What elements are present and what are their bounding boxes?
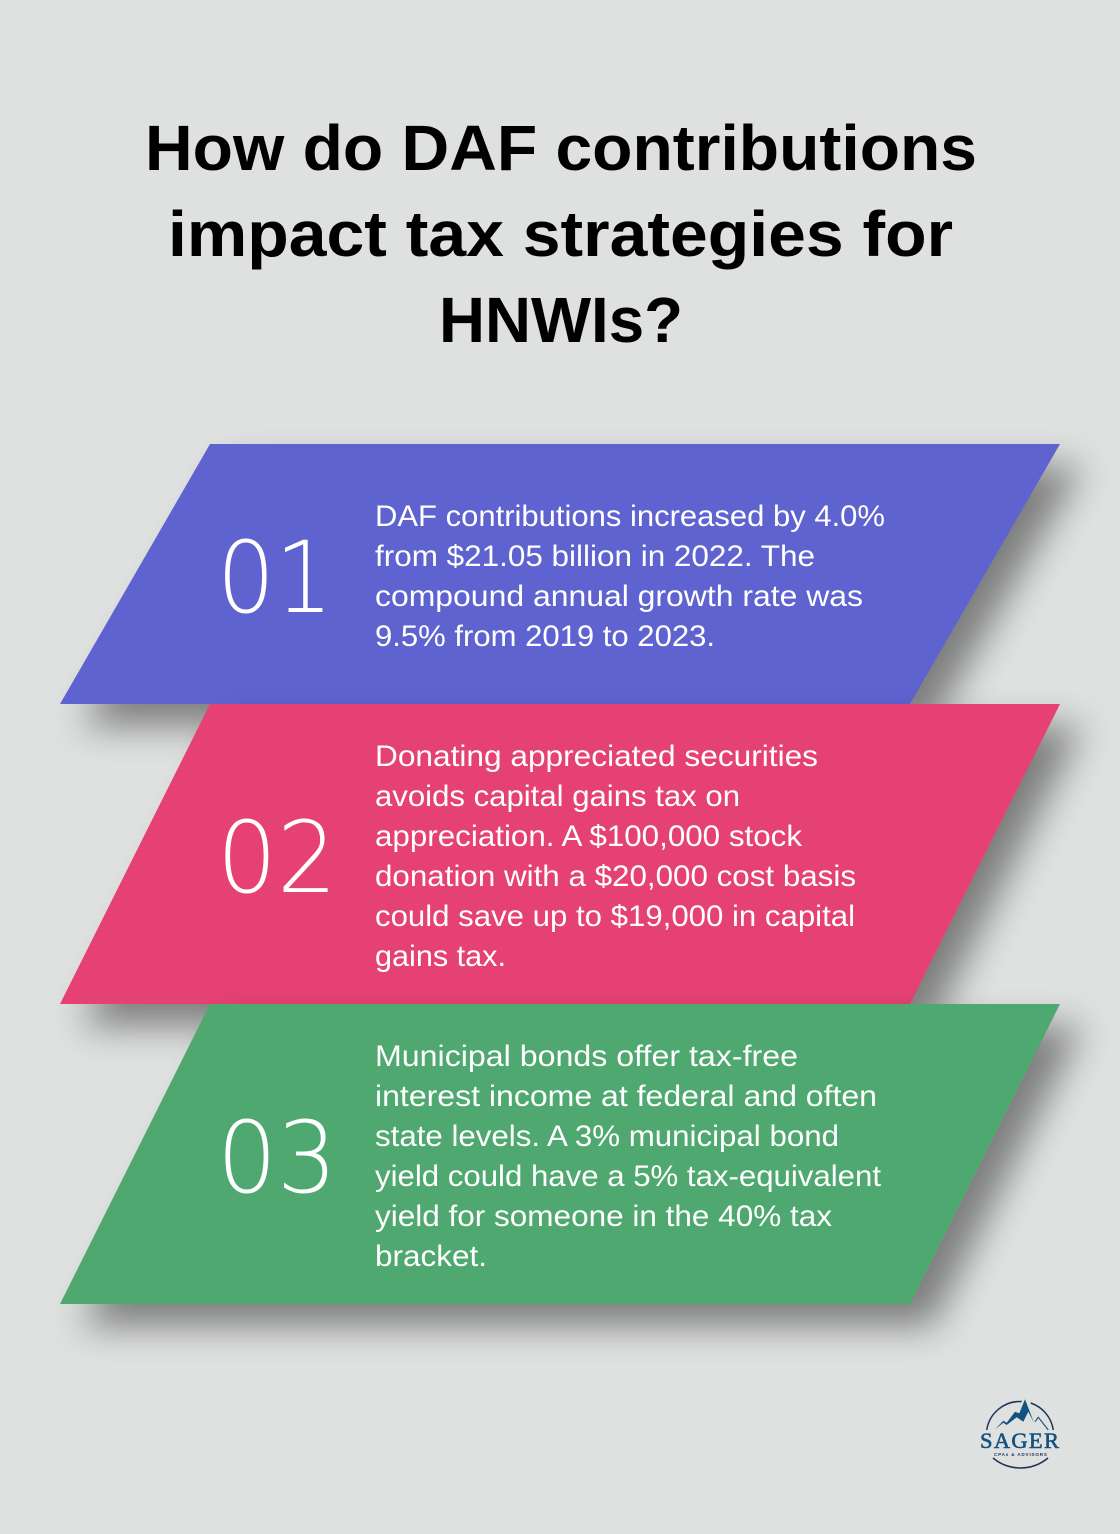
text block 03: yield could have a 5% tax-equivalent [375, 1160, 882, 1193]
text block 01: from $21.05 billion in 2022. The [375, 540, 815, 573]
text block 02: avoids capital gains tax on [375, 780, 740, 813]
text block 03: bracket. [375, 1240, 487, 1273]
text block 02 [375, 740, 856, 973]
text block 02: could save up to $19,000 in capital [375, 900, 855, 933]
title: How do DAF contributions [145, 112, 977, 184]
text block 02: donation with a $20,000 cost basis [375, 860, 856, 893]
panel: step 01 [60, 444, 1082, 726]
panel: step 02 [60, 704, 1082, 1026]
number 01: 01 [217, 521, 333, 636]
title: HNWIs? [439, 284, 683, 356]
number 03: 03 [217, 1101, 337, 1216]
text block 02: Donating appreciated securities [375, 740, 818, 773]
text block 03 [375, 1040, 882, 1273]
icon: Sager logo [980, 1399, 1059, 1468]
text block 01: compound annual growth rate was [375, 580, 863, 613]
logo mountains [995, 1399, 1034, 1429]
text block 03: Municipal bonds offer tax-free [375, 1040, 798, 1073]
text block 02: gains tax. [375, 940, 506, 973]
icon: Sager logo: CPAs & ADVISORS [994, 1452, 1047, 1457]
title [145, 112, 977, 356]
text block 03: yield for someone in the 40% tax [375, 1200, 832, 1233]
panel: step 03 [60, 1004, 1082, 1326]
text block 02: appreciation. A $100,000 stock [375, 820, 803, 853]
text block 01: 9.5% from 2019 to 2023. [375, 620, 715, 653]
text block 03: state levels. A 3% municipal bond [375, 1120, 839, 1153]
text block 03: interest income at federal and often [375, 1080, 877, 1113]
logo wordmark: SAGER [980, 1428, 1059, 1453]
number 02: 02 [217, 801, 337, 916]
logo ring [987, 1401, 1053, 1468]
text block 01: DAF contributions increased by 4.0% [375, 500, 885, 533]
text block 01 [375, 500, 885, 653]
title: impact tax strategies for [168, 198, 953, 270]
